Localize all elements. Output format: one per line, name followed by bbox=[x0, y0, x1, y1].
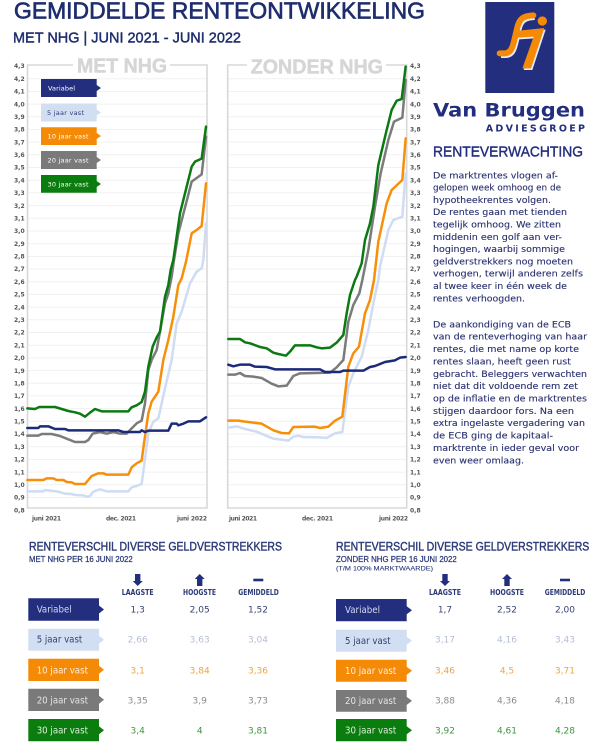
text block: paragraph 1: al twee keer in één week de bbox=[433, 281, 567, 292]
y axis labels: 1,6 bbox=[14, 406, 25, 413]
logo bbox=[485, 2, 554, 93]
row: 5 jaar vast bbox=[336, 630, 575, 652]
row: 20 jaar vast bbox=[336, 690, 575, 712]
text block: paragraph 1 bbox=[433, 171, 583, 304]
row: 5 jaar vast: 3,17 bbox=[435, 636, 455, 646]
row: 20 jaar vast: 3,73 bbox=[248, 696, 268, 706]
y axis labels: 0,8 bbox=[410, 507, 421, 514]
row: 30 jaar vast: 30 jaar vast bbox=[345, 725, 397, 736]
y axis labels: 3,3 bbox=[410, 190, 421, 197]
y axis labels: 3,9 bbox=[410, 114, 421, 121]
row: variabel bbox=[28, 598, 268, 621]
y axis labels: 0,9 bbox=[410, 495, 421, 502]
text block: paragraph 2: stijgen daardoor fors. Na een bbox=[433, 407, 574, 417]
row: 5 jaar vast: 3,04 bbox=[248, 636, 268, 646]
text block: paragraph 1: middenin een golf aan ver- bbox=[433, 233, 562, 243]
text block: paragraph 2: niet dat dit voldoende rem zet bbox=[433, 382, 578, 392]
text block: paragraph 2: De aankondiging van de ECB bbox=[433, 320, 571, 330]
y axis labels: 1,8 bbox=[410, 380, 421, 388]
row: 30 jaar vast: 3,92 bbox=[435, 726, 455, 736]
y axis labels: 3,6 bbox=[410, 152, 421, 159]
y axis labels: 2,3 bbox=[410, 317, 421, 324]
lines bbox=[27, 127, 206, 497]
column headers: GEMIDDELD bbox=[545, 588, 585, 597]
row: 5 jaar vast: 3,63 bbox=[190, 636, 210, 646]
column headers: LAAGSTE bbox=[122, 588, 154, 597]
column headers: HOOGSTE bbox=[183, 588, 216, 597]
row: 5 jaar vast bbox=[28, 629, 268, 651]
heading: renteverwachting: RENTEVERWACHTING bbox=[433, 144, 583, 161]
x axis labels bbox=[31, 516, 207, 523]
table heading: RENTEVERSCHIL DIVERSE GELDVERSTREKKERS bbox=[29, 542, 282, 554]
y axis labels: 1,0 bbox=[410, 482, 421, 489]
text block: paragraph 2: van de renteverhoging van haar bbox=[433, 333, 587, 343]
y axis labels: 3,1 bbox=[14, 216, 25, 222]
row: 30 jaar vast: 4,28 bbox=[555, 726, 575, 736]
y axis labels: 2,7 bbox=[410, 266, 421, 273]
y axis labels: 2,9 bbox=[14, 241, 25, 248]
chart heading: zonder NHG: ZONDER NHG bbox=[251, 56, 383, 78]
legend: 30 jaar vast: 30 jaar vast bbox=[48, 180, 89, 188]
row: 20 jaar vast bbox=[28, 689, 268, 711]
y axis labels: 2,4 bbox=[410, 304, 421, 311]
row: 30 jaar vast: 30 jaar vast bbox=[37, 725, 88, 736]
y axis labels: 2,5 bbox=[14, 292, 25, 299]
text block: paragraph 1: gelopen week omhoog en de bbox=[433, 184, 561, 194]
y axis labels: 1,3 bbox=[14, 444, 25, 451]
y axis labels: 2,3 bbox=[14, 317, 25, 324]
row: variabel: 2,52 bbox=[497, 605, 517, 615]
text block: paragraph 1: De marktrentes vlogen af- bbox=[433, 171, 558, 181]
y axis labels: 3,7 bbox=[14, 139, 25, 146]
legend bbox=[41, 79, 101, 193]
chart heading: met NHG: MET NHG bbox=[77, 56, 167, 78]
row: 20 jaar vast: 3,88 bbox=[435, 696, 455, 706]
row: 30 jaar vast: 4,61 bbox=[497, 726, 517, 736]
y axis labels: 0,9 bbox=[14, 495, 25, 502]
row: 20 jaar vast: 4,36 bbox=[497, 696, 517, 706]
y axis labels: 1,1 bbox=[410, 469, 421, 476]
row: variabel: 1,7 bbox=[438, 605, 452, 615]
row: variabel: 1,3 bbox=[131, 605, 145, 615]
row: variabel: Variabel bbox=[37, 604, 72, 615]
y axis labels: 1,6 bbox=[410, 406, 421, 413]
y axis labels: 1,2 bbox=[14, 457, 25, 464]
x axis labels: juni 2022 bbox=[176, 516, 207, 523]
icon: minus bbox=[560, 579, 570, 581]
legend: 20 jaar vast: 20 jaar vast bbox=[48, 156, 89, 164]
y axis labels: 1,4 bbox=[410, 431, 421, 438]
y axis labels: 4,2 bbox=[410, 76, 421, 83]
column headers: LAAGSTE bbox=[429, 588, 461, 597]
legend: 5 jaar vast: 5 jaar vast bbox=[47, 109, 84, 117]
row: 5 jaar vast: 3,43 bbox=[555, 636, 575, 646]
y axis labels: 2,7 bbox=[14, 266, 25, 273]
y axis labels: 3,7 bbox=[410, 139, 421, 146]
subtitle: MET NHG | JUNI 2021 - JUNI 2022 bbox=[13, 30, 241, 47]
y axis labels: 4,3 bbox=[410, 63, 421, 70]
y axis labels: 1,3 bbox=[410, 444, 421, 451]
y axis labels: 1,7 bbox=[14, 393, 25, 400]
legend: variabel: Variabel bbox=[48, 84, 75, 92]
y axis labels: 1,5 bbox=[410, 418, 421, 426]
y axis labels: 4,1 bbox=[410, 89, 421, 96]
row: variabel: Variabel bbox=[345, 605, 380, 616]
row: 10 jaar vast: 3,84 bbox=[190, 666, 210, 676]
y axis labels: 2,8 bbox=[14, 254, 25, 261]
row: 10 jaar vast bbox=[28, 659, 268, 681]
company subline: ADVIESGROEP bbox=[486, 124, 585, 135]
y axis labels: 2,6 bbox=[14, 279, 25, 286]
text block: paragraph 1: rentes verhoogden. bbox=[433, 294, 525, 304]
row: 10 jaar vast: 3,1 bbox=[131, 666, 145, 676]
row: 5 jaar vast: 5 jaar vast bbox=[37, 635, 83, 646]
y axis labels: 1,1 bbox=[14, 469, 25, 476]
y axis labels: 1,4 bbox=[14, 431, 25, 438]
text block: paragraph 2: de ECB ging de kapitaal- bbox=[433, 432, 553, 442]
row: 10 jaar vast: 3,46 bbox=[435, 666, 455, 676]
text block: paragraph 2: rentes, die met name op korte bbox=[433, 345, 579, 355]
y axis labels: 3,5 bbox=[14, 165, 25, 172]
lines bbox=[228, 67, 406, 441]
y axis labels: 3,0 bbox=[14, 228, 25, 235]
y axis labels: 2,2 bbox=[14, 330, 25, 337]
row: 30 jaar vast: 3,4 bbox=[131, 726, 145, 736]
y axis labels: 3,4 bbox=[410, 177, 421, 184]
table note: (T/M 100% MARKTWAARDE) bbox=[336, 566, 433, 573]
table subheading: ZONDER NHG PER 16 JUNI 2022 bbox=[336, 555, 457, 564]
chart: zonder NHG bbox=[228, 56, 421, 523]
row: 20 jaar vast: 3,9 bbox=[193, 696, 207, 706]
column headers bbox=[429, 588, 585, 597]
row: 30 jaar vast: 3,81 bbox=[248, 726, 268, 736]
chart: met NHG bbox=[14, 56, 207, 523]
icon: arrow down bbox=[133, 574, 143, 586]
icon: arrow down bbox=[440, 574, 450, 586]
y axis labels bbox=[410, 63, 421, 514]
row: 5 jaar vast: 4,16 bbox=[497, 636, 517, 646]
y axis labels: 2,4 bbox=[14, 304, 25, 311]
legend: 10 jaar vast: 10 jaar vast bbox=[48, 132, 89, 140]
y axis labels: 3,2 bbox=[410, 203, 421, 210]
company name: Van Bruggen bbox=[433, 100, 585, 122]
y axis labels: 2,0 bbox=[14, 355, 25, 362]
table subheading: MET NHG PER 16 JUNI 2022 bbox=[29, 555, 133, 564]
text block: paragraph 2: gebracht. Beleggers verwachten bbox=[433, 370, 587, 380]
x axis labels: dec. 2021 bbox=[302, 516, 333, 523]
y axis labels: 2,5 bbox=[410, 292, 421, 299]
y axis labels: 1,8 bbox=[14, 380, 25, 388]
row: variabel: 2,00 bbox=[555, 605, 575, 615]
row: 10 jaar vast: 10 jaar vast bbox=[37, 665, 88, 676]
row: 30 jaar vast bbox=[336, 719, 575, 741]
y axis labels: 3,3 bbox=[14, 190, 25, 197]
icon: fi mark bbox=[500, 15, 547, 70]
y axis labels: 4,0 bbox=[14, 101, 25, 108]
text block: paragraph 2: extra ingelaste vergadering van bbox=[433, 419, 585, 429]
y axis labels: 1,7 bbox=[410, 393, 421, 400]
row: 5 jaar vast: 2,66 bbox=[128, 636, 148, 646]
y axis labels: 3,2 bbox=[14, 203, 25, 210]
row: 10 jaar vast: 3,71 bbox=[555, 666, 575, 676]
panel: table zonder NHG bbox=[336, 542, 590, 741]
y axis labels: 2,0 bbox=[410, 355, 421, 362]
text block: paragraph 2 bbox=[433, 320, 587, 466]
text block: paragraph 2: marktrente in ieder geval voor bbox=[433, 444, 579, 454]
text block: paragraph 1: tegelijk omhoog. We zitten bbox=[433, 220, 561, 230]
y axis labels: 3,4 bbox=[14, 177, 25, 184]
icon: arrow up bbox=[195, 574, 205, 586]
y axis labels: 1,9 bbox=[410, 368, 421, 375]
y axis labels: 4,3 bbox=[14, 63, 25, 70]
y axis labels: 4,2 bbox=[14, 76, 25, 83]
y axis labels: 2,6 bbox=[410, 279, 421, 286]
row: 10 jaar vast bbox=[336, 660, 575, 682]
text block: paragraph 1: geldverstrekkers nog moeten bbox=[433, 257, 573, 267]
row: 20 jaar vast: 20 jaar vast bbox=[37, 695, 88, 706]
y axis labels: 0,8 bbox=[14, 507, 25, 514]
text block: paragraph 1: hogingen, waarbij sommige bbox=[433, 245, 565, 255]
y axis labels: 2,1 bbox=[14, 342, 25, 349]
y axis labels: 2,9 bbox=[410, 241, 421, 248]
row: 10 jaar vast: 10 jaar vast bbox=[345, 666, 397, 677]
text block: paragraph 1: hypotheekrentes volgen. bbox=[433, 196, 551, 206]
row: 10 jaar vast: 4,5 bbox=[500, 666, 514, 676]
y axis labels: 3,5 bbox=[410, 165, 421, 172]
text block: paragraph 1: verhogen, terwijl anderen zelfs bbox=[433, 270, 583, 280]
row: variabel bbox=[336, 599, 575, 621]
row: 20 jaar vast: 20 jaar vast bbox=[345, 696, 397, 707]
y axis labels: 3,8 bbox=[410, 127, 421, 134]
text block: paragraph 2: rentes slaan, heeft geen rust bbox=[433, 357, 571, 367]
icon: minus bbox=[253, 579, 263, 581]
y axis labels: 1,0 bbox=[14, 482, 25, 489]
y axis labels: 3,9 bbox=[14, 114, 25, 121]
y axis labels: 3,8 bbox=[14, 127, 25, 134]
panel: table met NHG bbox=[28, 542, 282, 741]
row: 5 jaar vast: 5 jaar vast bbox=[345, 636, 391, 647]
x axis labels: dec. 2021 bbox=[106, 516, 136, 523]
y axis labels: 3,6 bbox=[14, 152, 25, 159]
y axis labels: 1,9 bbox=[14, 368, 25, 375]
x axis labels bbox=[228, 516, 408, 523]
y axis labels: 1,5 bbox=[14, 418, 25, 426]
row: 20 jaar vast: 4,18 bbox=[555, 696, 575, 706]
y axis labels: 1,2 bbox=[410, 457, 421, 464]
row: 30 jaar vast: 4 bbox=[197, 726, 203, 736]
y axis labels bbox=[14, 63, 25, 514]
column headers bbox=[122, 588, 279, 597]
icon: arrow up bbox=[502, 574, 512, 586]
row: 20 jaar vast: 3,35 bbox=[128, 696, 148, 706]
text block: paragraph 2: even weer omlaag. bbox=[433, 456, 524, 466]
y axis labels: 4,1 bbox=[14, 89, 25, 96]
row: 30 jaar vast bbox=[28, 719, 268, 741]
text block: paragraph 1: De rentes gaan met tienden bbox=[433, 208, 567, 218]
column headers: GEMIDDELD bbox=[238, 588, 279, 597]
y axis labels: 2,1 bbox=[410, 342, 421, 349]
x axis labels: juni 2022 bbox=[378, 516, 408, 523]
text block: paragraph 2: op de inflatie en de marktrentes bbox=[433, 394, 587, 404]
y axis labels: 2,2 bbox=[410, 330, 421, 337]
y axis labels: 3,1 bbox=[410, 216, 421, 222]
row: variabel: 2,05 bbox=[190, 605, 210, 615]
column headers: HOOGSTE bbox=[490, 588, 524, 597]
row: 10 jaar vast: 3,36 bbox=[248, 666, 268, 676]
x axis labels: juni 2021 bbox=[228, 516, 257, 523]
y axis labels: 3,0 bbox=[410, 228, 421, 235]
y axis labels: 4,0 bbox=[410, 101, 421, 108]
y axis labels: 2,8 bbox=[410, 254, 421, 261]
row: variabel: 1,52 bbox=[248, 605, 268, 615]
x axis labels: juni 2021 bbox=[31, 516, 61, 523]
